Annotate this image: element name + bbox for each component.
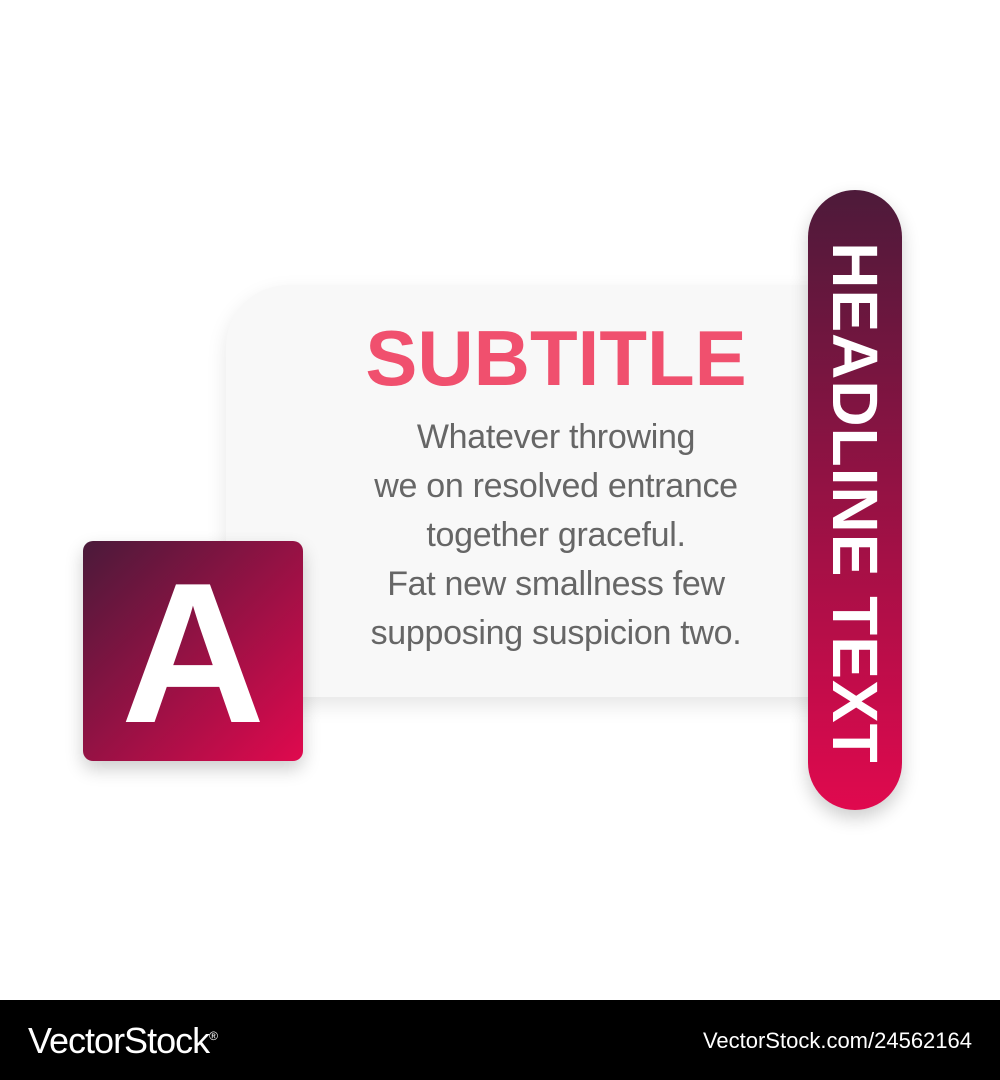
headline text: HEADLINE TEXT — [819, 242, 891, 764]
subtitle: SUBTITLE — [365, 314, 747, 402]
panel: text card — [226, 285, 830, 697]
body text: Whatever throwing — [417, 418, 695, 456]
body text: supposing suspicion two. — [371, 614, 741, 652]
footer url: VectorStock.com/24562164 — [703, 1028, 972, 1053]
footer bar — [0, 1000, 1000, 1080]
body text — [371, 418, 741, 652]
footer logo: VectorStock® — [28, 1020, 217, 1061]
body text: we on resolved entrance — [374, 467, 738, 505]
body text: together graceful. — [426, 516, 686, 554]
body text: Fat new smallness few — [387, 565, 725, 603]
headline pill — [808, 190, 902, 810]
icon: letter A square — [83, 541, 303, 761]
icon: letter A square: A — [121, 542, 265, 765]
